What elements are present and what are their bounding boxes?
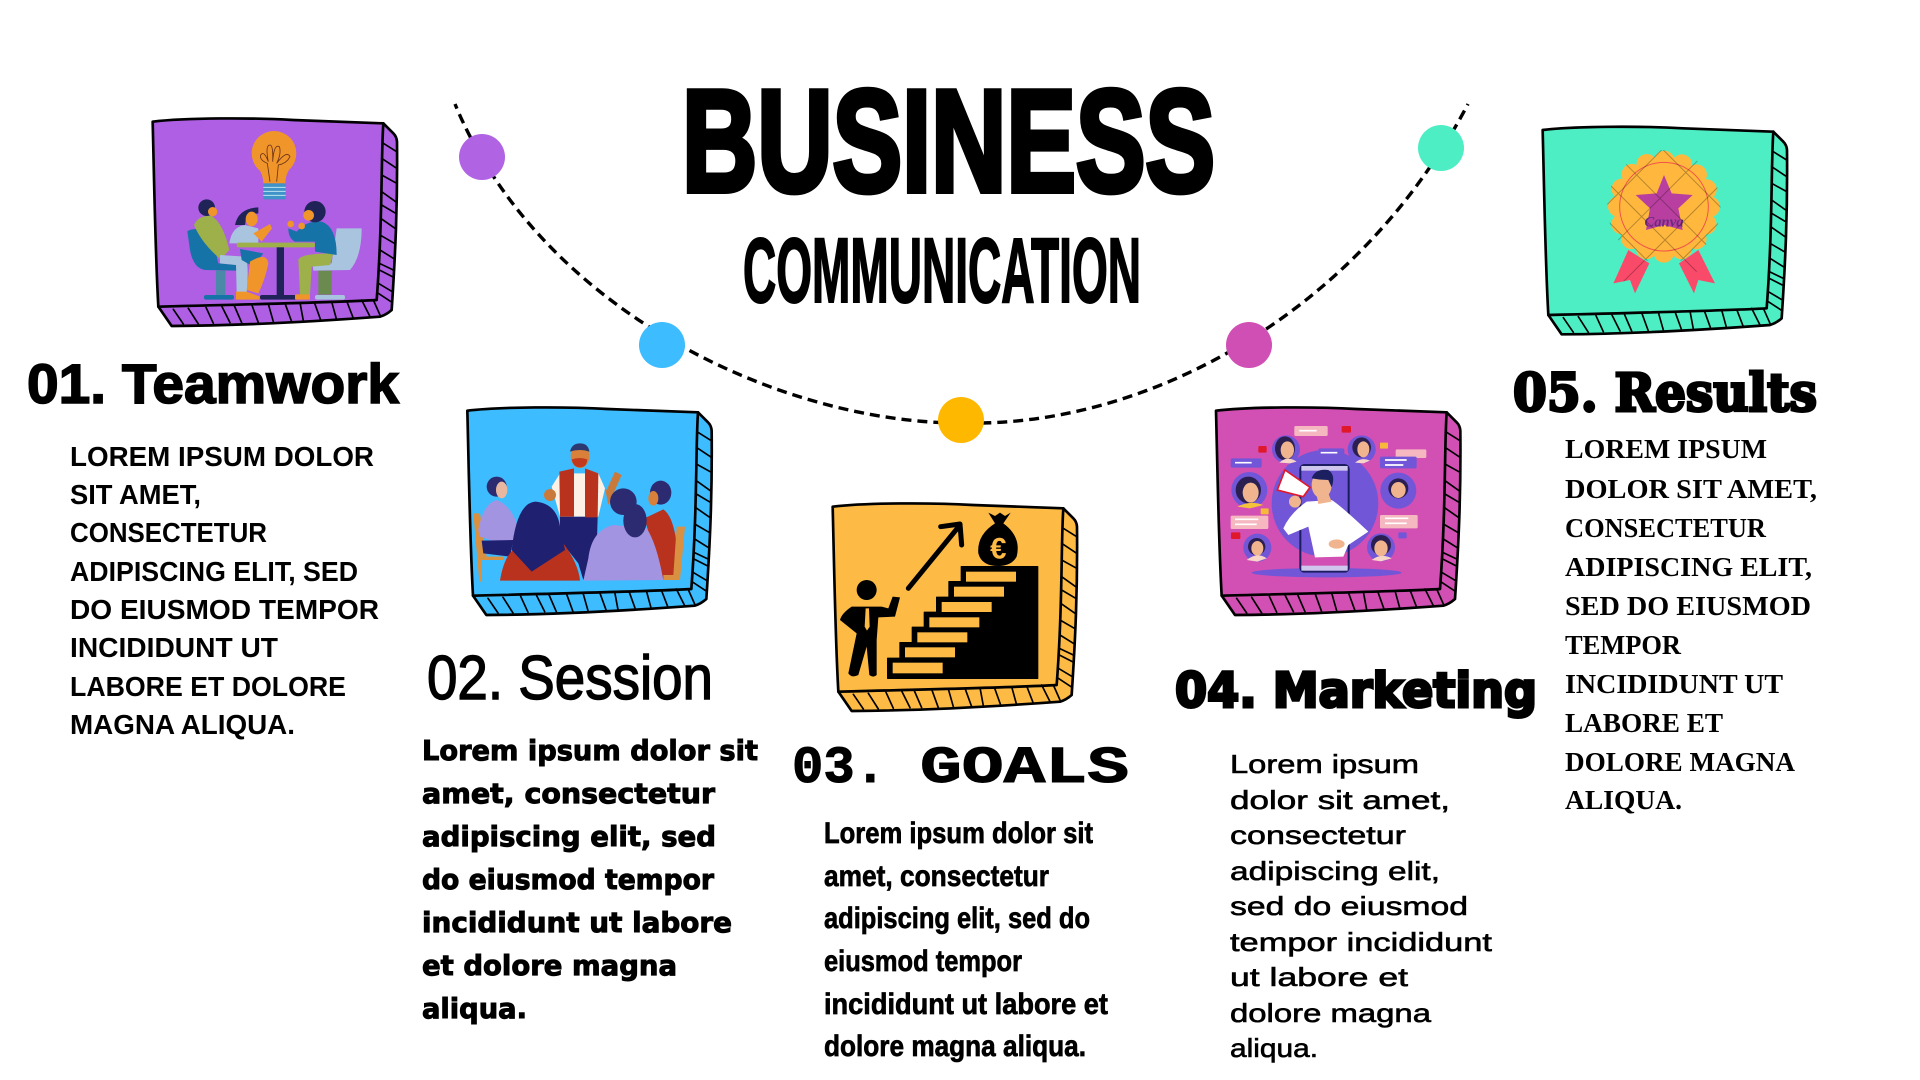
text block: results body: LABORE ET xyxy=(1565,708,1723,738)
text block: marketing body: ut labore et xyxy=(1230,962,1409,992)
title: BUSINESS xyxy=(682,60,1215,222)
text block: teamwork body: LABORE ET DOLORE xyxy=(70,671,346,702)
text block: results body: ALIQUA. xyxy=(1565,785,1682,815)
text block: session body: amet, consectetur xyxy=(422,777,715,810)
text block: goals body: Lorem ipsum dolor sit xyxy=(824,817,1093,850)
text block: teamwork body xyxy=(70,441,379,740)
text block: marketing body: Lorem ipsum xyxy=(1230,749,1419,779)
card illustration: results: Canva xyxy=(1644,215,1684,231)
text block: marketing body: sed do eiusmod xyxy=(1230,891,1468,921)
heading: 03. GOALS: 03. xyxy=(792,739,886,798)
text block: session body: aliqua. xyxy=(422,992,527,1025)
text block: marketing body: dolor sit amet, xyxy=(1230,785,1450,815)
text block: goals body: incididunt ut labore et xyxy=(824,988,1108,1021)
text block: results body: DOLORE MAGNA xyxy=(1565,747,1796,777)
heading: 04. Marketing: 04. Marketing xyxy=(1175,663,1537,719)
text block: results body: ADIPISCING ELIT, xyxy=(1565,552,1812,582)
text block: session body: incididunt ut labore xyxy=(422,906,732,939)
text block: marketing body: tempor incididunt xyxy=(1230,927,1493,957)
timeline: dashed curve with five dots xyxy=(455,104,1468,443)
text block: results body: LOREM IPSUM xyxy=(1565,434,1767,464)
text block: teamwork body: ADIPISCING ELIT, SED xyxy=(70,556,358,587)
card illustration: marketing xyxy=(1216,407,1460,615)
title xyxy=(682,60,1215,322)
text block: marketing body: aliqua. xyxy=(1230,1033,1318,1063)
text block: teamwork body: INCIDIDUNT UT xyxy=(70,632,278,663)
text block: goals body: adipiscing elit, sed do xyxy=(824,902,1090,935)
title: COMMUNICATION xyxy=(743,220,1141,322)
card illustration: session xyxy=(467,407,712,615)
heading: 03. GOALS xyxy=(792,739,1129,798)
heading: 02. Session: 02. Session xyxy=(427,644,713,713)
text block: goals body: dolore magna aliqua. xyxy=(824,1030,1086,1063)
text block: teamwork body: MAGNA ALIQUA. xyxy=(70,709,295,740)
text block: results body: CONSECTETUR xyxy=(1565,513,1766,543)
text block: marketing body xyxy=(1230,749,1493,1063)
text block: session body: Lorem ipsum dolor sit xyxy=(422,734,758,767)
text block: session body: do eiusmod tempor xyxy=(422,863,714,896)
card illustration: results xyxy=(1543,127,1787,334)
text block: session body: adipiscing elit, sed xyxy=(422,820,716,853)
panel: 01 teamwork xyxy=(27,118,400,740)
text block: session body: et dolore magna xyxy=(422,949,677,982)
text block: results body: TEMPOR xyxy=(1565,630,1681,660)
text block: goals body: eiusmod tempor xyxy=(824,945,1022,978)
text block: marketing body: adipiscing elit, xyxy=(1230,856,1440,886)
card illustration: goals xyxy=(833,503,1077,711)
panel: 02 session xyxy=(422,407,758,1025)
text block: teamwork body: DO EIUSMOD TEMPOR xyxy=(70,594,379,625)
text block: results body: SED DO EIUSMOD xyxy=(1565,591,1811,621)
text block: teamwork body: CONSECTETUR xyxy=(70,517,267,548)
heading: 03. GOALS: GOALS xyxy=(920,739,1129,798)
text block: results body: INCIDIDUNT UT xyxy=(1565,669,1783,699)
text block: teamwork body: SIT AMET, xyxy=(70,479,201,510)
text block: goals body xyxy=(824,817,1108,1063)
text block: marketing body: dolore magna xyxy=(1230,998,1432,1028)
text block: results body: DOLOR SIT AMET, xyxy=(1565,474,1817,504)
text block: session body xyxy=(422,734,758,1025)
text block: teamwork body: LOREM IPSUM DOLOR xyxy=(70,441,374,472)
panel: 05 results xyxy=(1513,127,1817,815)
heading: 01. Teamwork: 01. Teamwork xyxy=(27,352,400,415)
heading: 05. Results: 05. Results xyxy=(1513,363,1817,424)
panel: 04 marketing xyxy=(1175,407,1537,1063)
card illustration: goals: € xyxy=(990,532,1006,565)
text block: goals body: amet, consectetur xyxy=(824,860,1049,893)
text block: marketing body: consectetur xyxy=(1230,820,1406,850)
card illustration: teamwork xyxy=(153,118,397,326)
panel: 03 goals xyxy=(792,503,1129,1063)
text block: results body xyxy=(1565,434,1817,815)
